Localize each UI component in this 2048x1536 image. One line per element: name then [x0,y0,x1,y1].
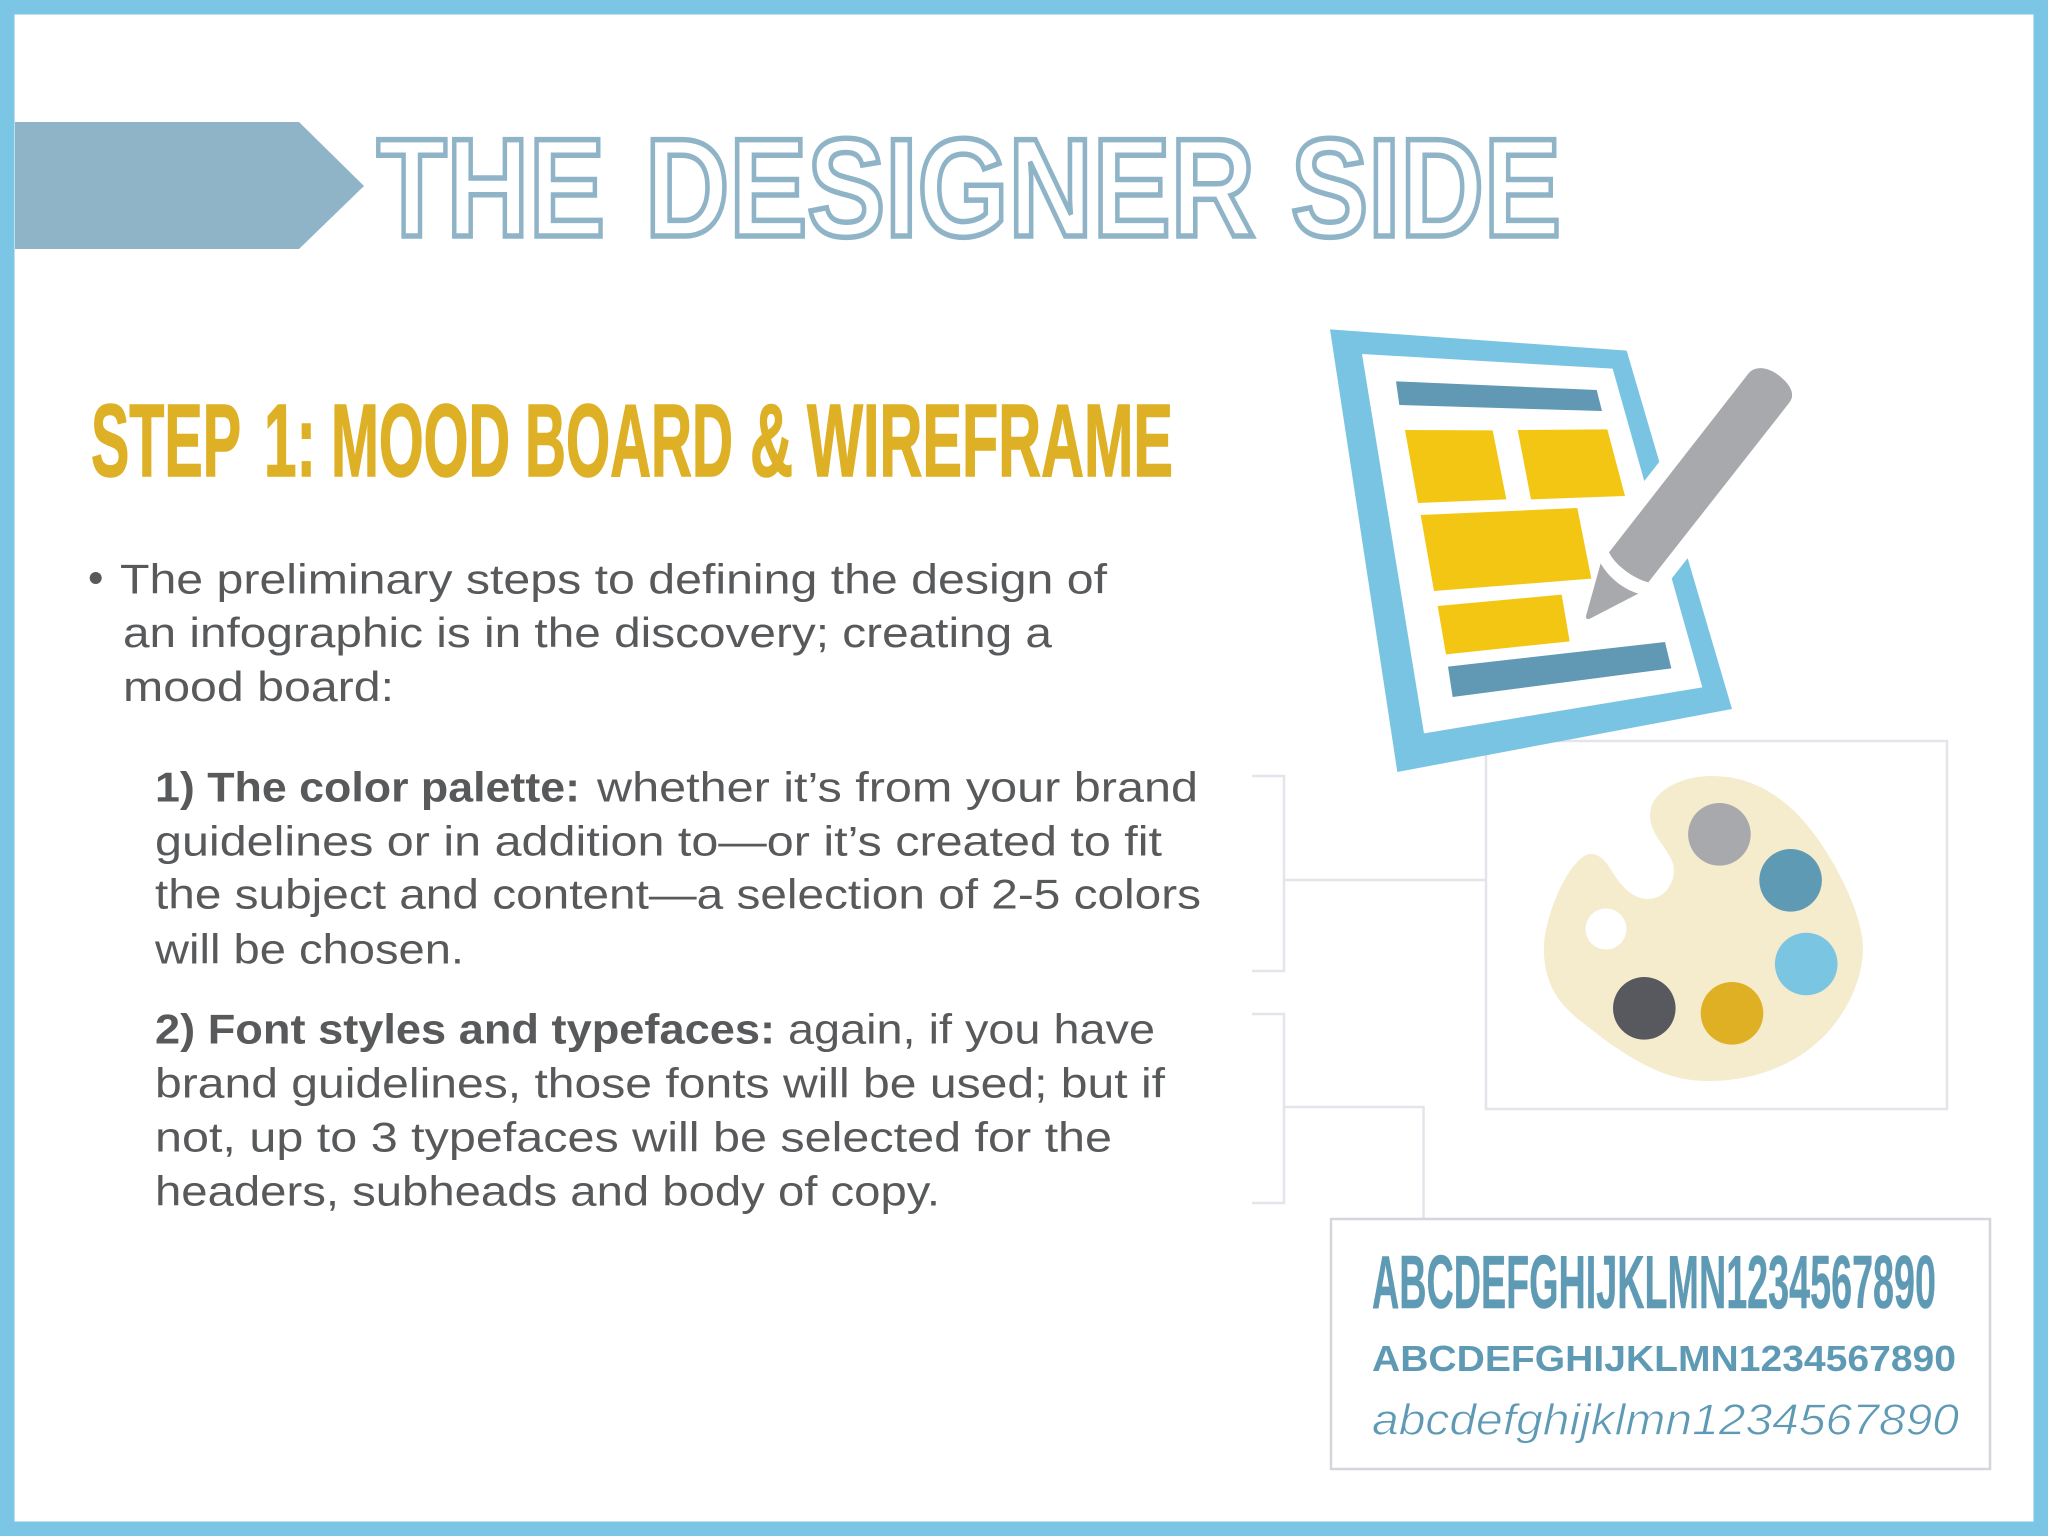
connector: fonts bracket [1252,1014,1424,1219]
title: DESIGNER [645,109,1255,266]
sample box [1331,1219,1990,1469]
intro lines: mood board: [123,663,394,710]
step heading: MOOD [331,383,510,498]
paragraph: font styles: again, if you have [788,1005,1155,1052]
intro lines [120,555,1107,710]
title: SIDE [1291,109,1561,266]
title [377,109,1561,266]
paint: sky blue [1775,933,1837,995]
intro lines: The preliminary steps to defining the design of [120,555,1107,602]
pencil tip [1586,563,1638,619]
step heading [91,383,1173,498]
paragraph: color palette: guidelines or in addition to—or it’s created to fit [155,817,1162,864]
intro lines: an infographic is in the discovery; creating a [123,609,1053,656]
panel: font samples [1331,1219,1990,1469]
document frame [1330,329,1732,772]
palette board [1544,776,1863,1081]
paragraph: color palette: 1) The color palette: [155,763,580,810]
sample: bold caps: ABCDEFGHIJKLMN1234567890 [1372,1338,1956,1379]
step heading: WIREFRAME [807,383,1173,498]
paragraph: color palette [154,763,1201,972]
intro bullet text [90,555,1107,710]
paragraph: font styles: 2) Font styles and typefaces: [155,1005,775,1052]
document page [1362,354,1702,733]
paragraph: color palette: whether it’s from your brand [596,763,1198,810]
paragraph: color palette: the subject and content—a selection of 2-5 colors [155,871,1201,918]
wireframe: block 2 [1518,429,1625,499]
bullet dot [90,572,102,584]
paragraph: font styles [155,1005,1165,1214]
pencil body [1609,368,1792,582]
paint: gold [1701,982,1763,1045]
paint: teal [1759,849,1822,912]
title: THE [377,109,605,266]
paragraph: color palette: will be chosen. [154,925,464,972]
sample: light italic: abcdefghijklmn1234567890 [1372,1396,1960,1445]
paint: charcoal [1613,977,1676,1040]
paint: grey [1688,803,1751,866]
wireframe: top bar [1396,381,1602,411]
thumb hole [1586,908,1626,950]
paragraph: font styles: brand guidelines, those fonts will be used; but if [155,1059,1165,1106]
icon: wireframe document with pencil [1330,329,1792,772]
connector: palette bracket [1252,776,1485,971]
panel: color palette [1486,741,1947,1109]
step heading: & [750,383,793,498]
wireframe: block 3 [1421,508,1591,591]
wireframe: bottom bar [1448,642,1671,697]
paragraph: font styles: not, up to 3 typefaces will be selected for the [155,1113,1112,1160]
step heading: STEP [91,383,241,498]
wireframe: block 4 [1438,595,1570,654]
wireframe: block 1 [1405,430,1506,503]
palette box [1486,741,1947,1109]
icon: paint palette [1544,776,1863,1081]
step heading: BOARD [525,383,733,498]
paragraph: font styles: headers, subheads and body of copy. [155,1167,940,1214]
pencil halo [1609,368,1792,582]
heading arrow banner [15,122,364,249]
step heading: 1: [264,383,316,498]
